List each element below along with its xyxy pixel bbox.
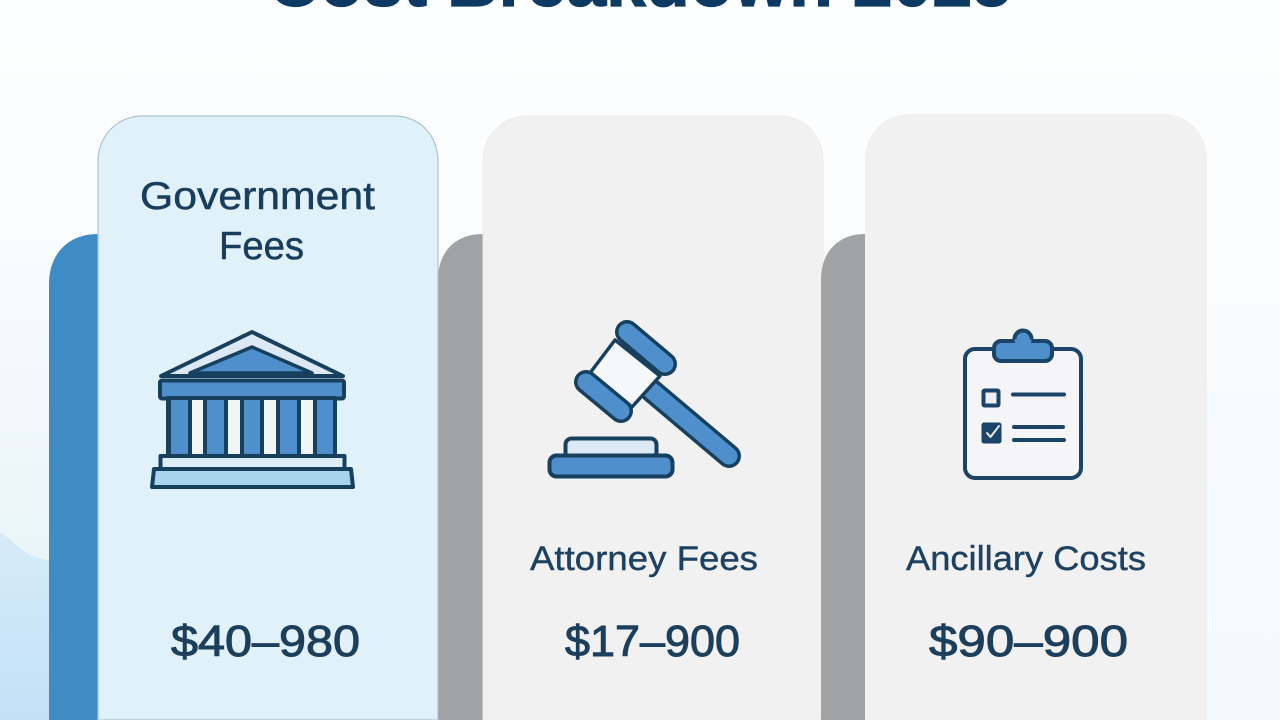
card background <box>98 116 438 720</box>
label: ancillary costs: Ancillary Costs <box>906 540 1146 578</box>
heading: government fees: Government <box>140 175 375 218</box>
heading: government fees <box>140 175 375 268</box>
card background <box>483 116 823 720</box>
background wave <box>0 532 49 720</box>
price: ancillary costs: $90–900 <box>929 617 1128 666</box>
label: attorney fees: Attorney Fees <box>530 540 758 578</box>
panel: government fees back tab <box>49 234 98 720</box>
panel: ancillary costs back tab <box>821 234 865 720</box>
price: government fees: $40–980 <box>171 617 360 666</box>
panel: attorney fees <box>483 116 823 720</box>
card background <box>865 114 1207 720</box>
heading: government fees: Fees <box>219 225 304 268</box>
panel: ancillary costs <box>865 114 1207 720</box>
icon: government building <box>152 332 353 487</box>
icon: clipboard <box>965 330 1081 478</box>
panel: attorney fees back tab <box>438 234 483 720</box>
price: attorney fees: $17–900 <box>565 617 740 666</box>
icon: gavel <box>550 332 729 476</box>
panel: government fees <box>98 116 438 720</box>
